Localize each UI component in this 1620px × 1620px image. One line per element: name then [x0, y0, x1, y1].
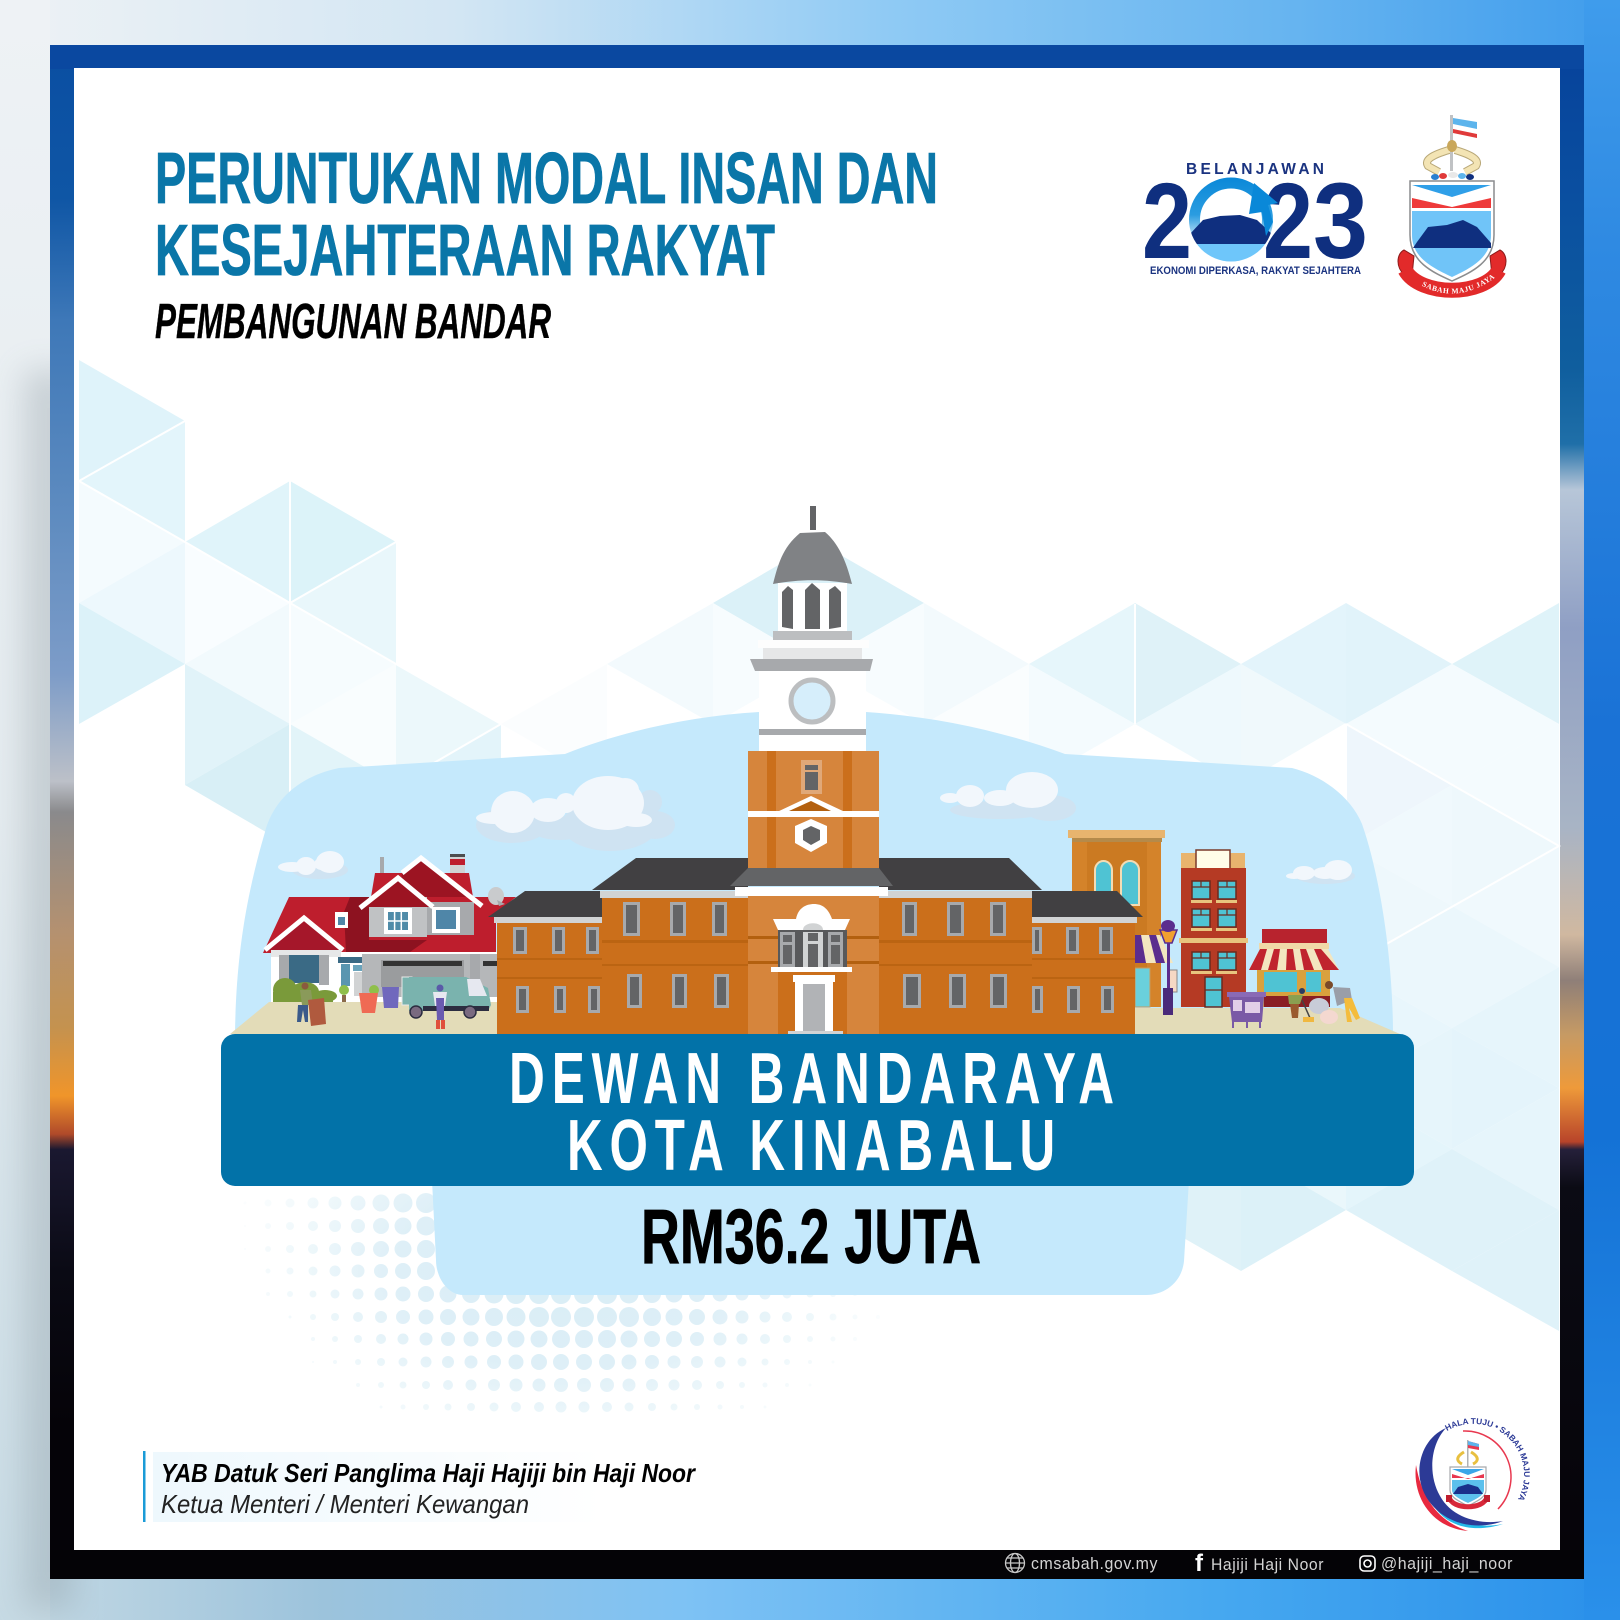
city hall: clock tower — [748, 506, 879, 870]
logo: Sabah crest — [1398, 115, 1506, 298]
title: PERUNTUKAN MODAL INSAN DAN — [155, 139, 938, 219]
icon: facebook: f — [1195, 1550, 1204, 1577]
subtitle: PEMBANGUNAN BANDAR — [155, 295, 551, 349]
icon: globe — [1006, 1554, 1024, 1572]
ground left — [230, 1002, 497, 1034]
logo: Belanjawan 2023: EKONOMI DIPERKASA, RAKYAT SEJAHTERA — [1150, 265, 1361, 277]
market shop — [1249, 929, 1339, 1007]
red brick building — [1179, 850, 1248, 1007]
logo: Belanjawan 2023: BELANJAWAN — [1186, 161, 1328, 178]
bar heading: DEWAN BANDARAYA — [509, 1039, 1121, 1119]
footer social links — [1006, 1550, 1513, 1577]
tan shop building — [1068, 830, 1173, 1007]
attribution: Ketua Menteri / Menteri Kewangan — [161, 1489, 529, 1519]
bulletin board — [1227, 992, 1266, 1028]
logo: Belanjawan 2023: 3 — [1313, 160, 1368, 281]
ground right — [1135, 1008, 1400, 1034]
city hall: outer left wing — [488, 891, 602, 1034]
bar heading — [509, 1039, 1121, 1186]
footer social links: @hajiji_haji_noor — [1381, 1554, 1513, 1573]
footer social links: cmsabah.gov.my — [1031, 1554, 1158, 1573]
allocation panel — [432, 1180, 1189, 1295]
footer social links: Hajiji Haji Noor — [1211, 1555, 1324, 1574]
street lamp — [1160, 920, 1177, 1015]
title — [155, 139, 938, 291]
city hall: outer right wing — [1032, 891, 1143, 1034]
allocation amount: RM36.2 JUTA — [641, 1194, 981, 1280]
sweeping workers — [1288, 981, 1360, 1024]
city hall: inner left wing — [592, 858, 748, 1034]
logo: Belanjawan 2023: 2 — [1142, 160, 1192, 281]
clouds — [278, 772, 1355, 884]
bar heading: KOTA KINABALU — [567, 1106, 1062, 1186]
attribution: YAB Datuk Seri Panglima Haji Hajiji bin Haji Noor — [161, 1458, 697, 1488]
sky hill panel — [235, 712, 1393, 1034]
emblem: Hala Tuju Sabah Maju Jaya — [1416, 1418, 1530, 1531]
garbage truck and workers — [297, 977, 491, 1029]
icon: instagram — [1360, 1556, 1375, 1571]
emblem: Hala Tuju Sabah Maju Jaya: HALA TUJU • SABAH MAJU JAYA — [1444, 1418, 1530, 1500]
halftone dots — [244, 1193, 880, 1412]
city hall: inner right wing — [879, 858, 1042, 1034]
title bar — [221, 1034, 1414, 1186]
title: KESEJAHTERAAN RAKYAT — [155, 211, 775, 291]
logo: Belanjawan 2023: 2 — [1263, 160, 1313, 281]
logo: Belanjawan 2023 — [1142, 160, 1368, 281]
attribution — [143, 1451, 697, 1522]
house illustration — [263, 854, 516, 1002]
logo: Sabah crest: SABAH MAJU JAYA — [1422, 275, 1495, 294]
hexagon triangle pattern — [79, 360, 1559, 1331]
city hall: centre entrance — [730, 868, 893, 1034]
